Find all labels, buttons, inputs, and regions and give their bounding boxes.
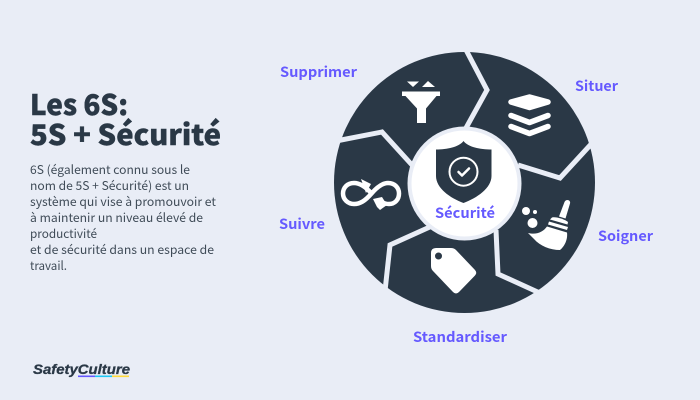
title: 5S + Sécurité xyxy=(30,114,221,154)
description text: système qui vise à promouvoir et xyxy=(30,193,216,210)
centre circle xyxy=(408,126,522,240)
label: Sécurité: Sécurité xyxy=(435,203,495,223)
icon: stacked layers xyxy=(511,97,548,134)
description text: travail. xyxy=(30,257,67,274)
icon: broom and bubbles xyxy=(522,200,570,250)
description text: à maintenir un niveau élevé de xyxy=(30,209,203,226)
label: Situer: Situer xyxy=(575,76,619,96)
description text: et de sécurité dans un espace de xyxy=(30,241,214,258)
title xyxy=(30,84,221,154)
label: Supprimer: Supprimer xyxy=(280,62,358,82)
label: Soigner: Soigner xyxy=(598,226,654,246)
label: Suivre: Suivre xyxy=(279,214,325,234)
description text: nom de 5S + Sécurité) est un xyxy=(30,177,189,194)
icon: shield with check xyxy=(436,141,492,203)
description text: productivité xyxy=(30,225,97,242)
icon: funnel xyxy=(402,81,440,123)
icon: tag xyxy=(431,248,476,294)
title: Les 6S: xyxy=(30,84,128,124)
description text xyxy=(30,161,216,274)
description text: 6S (également connu sous le xyxy=(30,161,190,178)
icon: infinity loop with arrows xyxy=(343,179,399,210)
wheel: six segments xyxy=(334,48,595,313)
label: Standardiser: Standardiser xyxy=(413,327,508,347)
logo: SafetyCulture: SafetyCulture xyxy=(33,361,130,377)
